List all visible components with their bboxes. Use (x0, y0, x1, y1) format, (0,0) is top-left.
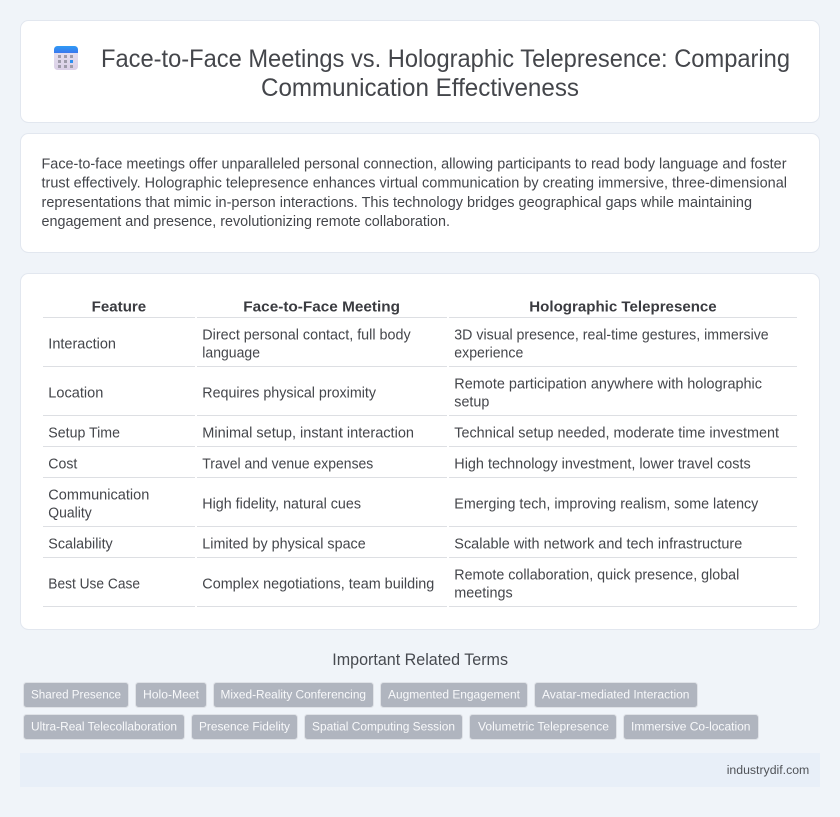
tag (380, 682, 528, 708)
table header row: Holographic Telepresence (529, 298, 717, 316)
tag (534, 682, 698, 708)
row: interaction (48, 327, 769, 361)
tag (214, 682, 374, 708)
text block: summary: representations that mimic in-person interactions. This technology bridges geographical gaps while maintaining (42, 195, 752, 211)
row: setup time: Minimal setup, instant interaction (202, 425, 414, 441)
row: location: setup (454, 394, 489, 410)
tag: Ultra-Real Telecollaboration (31, 720, 177, 734)
tag: Volumetric Telepresence (478, 720, 609, 734)
footer: industrydif.com (727, 763, 809, 777)
panel: summary paragraph (20, 134, 820, 252)
tag: Augmented Engagement (388, 688, 521, 702)
text block: summary: trust effectively. Holographic telepresence enhances virtual communication by creating immersive, three-dimensional (42, 176, 787, 192)
tag: Holo-Meet (143, 688, 200, 702)
tag: Shared Presence (31, 688, 121, 702)
row: location: Requires physical proximity (202, 385, 377, 401)
row: communication quality: Quality (48, 505, 92, 521)
row: best use case (48, 567, 739, 601)
tag (24, 714, 184, 740)
tag (24, 682, 128, 708)
title (101, 45, 790, 102)
table header row (92, 298, 717, 316)
tag: Presence Fidelity (199, 720, 291, 734)
text block: summary: Face-to-face meetings offer unparalleled personal connection, allowing participants to read body language and foster (42, 156, 787, 172)
tag (304, 714, 462, 740)
row: interaction: language (202, 345, 260, 361)
tag: Mixed-Reality Conferencing (220, 688, 366, 702)
tag: Spatial Computing Session (312, 720, 455, 734)
row: setup time: Technical setup needed, moderate time investment (454, 425, 779, 441)
tag (624, 714, 758, 740)
row: best use case: Remote collaboration, quick presence, global (454, 567, 739, 583)
row: cost: Travel and venue expenses (202, 456, 373, 472)
row: setup time: Setup Time (48, 425, 120, 441)
row: cost: Cost (48, 456, 77, 472)
row: interaction: Direct personal contact, full body (202, 327, 411, 343)
tag: Avatar-mediated Interaction (542, 688, 690, 702)
row: setup time (48, 425, 779, 441)
tags: related terms (24, 682, 758, 740)
row: scalability (48, 536, 742, 552)
row: communication quality: Communication (48, 487, 149, 503)
table rules (43, 317, 797, 607)
text block: summary: engagement and presence, revolutionizing remote collaboration. (42, 214, 450, 230)
tag (192, 714, 298, 740)
tag: Immersive Co-location (631, 720, 751, 734)
row: scalability: Scalable with network and tech infrastructure (454, 536, 742, 552)
row: location: Location (48, 385, 103, 401)
text block: summary (42, 156, 787, 230)
row: location (48, 376, 762, 410)
row: cost: High technology investment, lower travel costs (454, 456, 751, 472)
panel: title card (20, 20, 820, 122)
icon: calendar (54, 46, 78, 70)
table header row: Face-to-Face Meeting (243, 298, 400, 316)
row: communication quality: High fidelity, natural cues (202, 496, 361, 512)
row: communication quality (48, 487, 759, 521)
row: cost (48, 456, 751, 472)
tag (470, 714, 616, 740)
row: communication quality: Emerging tech, improving realism, some latency (454, 496, 759, 512)
row: location: Remote participation anywhere with holographic (454, 376, 762, 392)
tag (136, 682, 206, 708)
table header row: Feature (92, 298, 146, 316)
row: best use case: meetings (454, 585, 513, 601)
title: Communication Effectiveness (261, 74, 579, 102)
heading: important related terms: Important Related Terms (332, 651, 508, 669)
row: scalability: Limited by physical space (202, 536, 366, 552)
row: scalability: Scalability (48, 536, 113, 552)
title: Face-to-Face Meetings vs. Holographic Telepresence: Comparing (101, 45, 790, 73)
row: interaction: experience (454, 345, 523, 361)
row: interaction: Interaction (48, 336, 116, 352)
row: best use case: Best Use Case (48, 576, 140, 592)
row: best use case: Complex negotiations, team building (202, 576, 434, 592)
panel: comparison table (20, 274, 820, 630)
footer (20, 753, 820, 787)
row: interaction: 3D visual presence, real-time gestures, immersive (454, 327, 769, 343)
